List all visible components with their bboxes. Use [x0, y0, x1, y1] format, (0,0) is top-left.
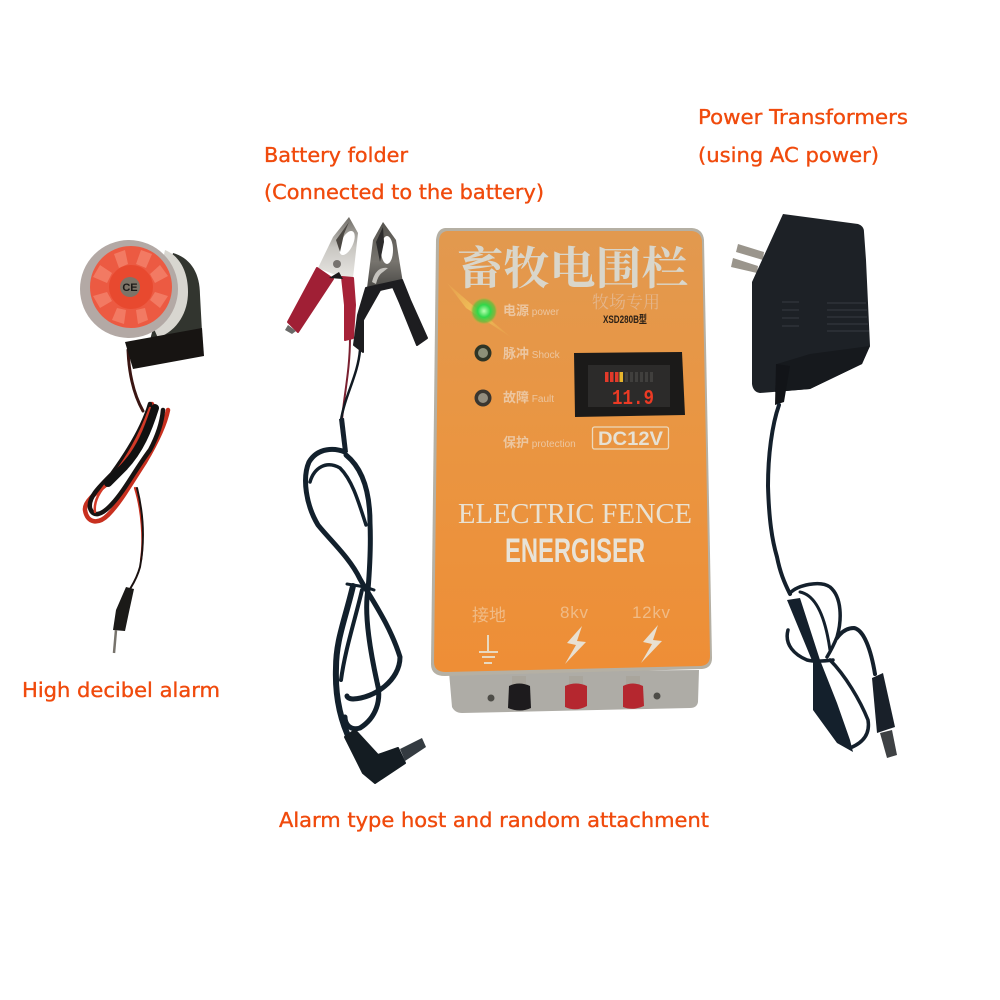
icon: lightning 8kv	[565, 626, 586, 664]
label: battery folder	[264, 143, 544, 204]
icon: lightning 12kv	[641, 625, 662, 663]
voltage display: 11.9	[612, 388, 654, 411]
terminal labels	[472, 603, 670, 625]
adapter cable	[768, 405, 875, 748]
panel: energiser unit	[431, 228, 712, 713]
LED labels: 故障 Fault	[503, 390, 554, 405]
terminals	[508, 676, 644, 710]
electric fence heading: ELECTRIC FENCE	[458, 498, 692, 530]
cable bundle	[787, 598, 853, 752]
adapter vents	[782, 302, 869, 331]
model number: XSD280B型	[603, 313, 647, 326]
siren cable bundle	[85, 350, 168, 589]
label: battery folder: (Connected to the battery)	[264, 180, 544, 204]
adapter prongs	[731, 244, 764, 273]
terminal labels: 8kv	[560, 603, 588, 622]
title chinese: 畜牧电围栏	[457, 244, 688, 294]
DC plug right angle	[345, 730, 405, 783]
mounting holes	[488, 692, 660, 702]
label: power transformers: (using AC power)	[698, 143, 879, 167]
label: battery folder: Battery folder	[264, 143, 409, 167]
black clip	[354, 222, 427, 352]
label: power transformers: Power Transformers	[698, 105, 908, 129]
subtitle chinese: 牧场专用	[592, 293, 660, 312]
energiser heading: ENERGISER	[505, 532, 645, 570]
siren body	[150, 253, 202, 340]
red clip	[285, 217, 358, 340]
cable sheath	[339, 418, 348, 452]
LED labels: 脉冲 Shock	[503, 346, 561, 361]
icon: ground symbol	[479, 635, 498, 663]
icon: alarm siren with cable	[80, 240, 204, 653]
terminal labels: 接地	[472, 606, 506, 625]
base plate	[449, 670, 699, 713]
clip wires	[341, 338, 360, 420]
label: power transformers	[698, 105, 908, 167]
LED labels: 电源 power	[503, 303, 560, 318]
icon: power adapter with cable	[731, 214, 897, 758]
adapter plug	[872, 673, 895, 733]
voltage display	[574, 352, 685, 417]
cable loops	[306, 449, 400, 742]
terminal labels: 12kv	[632, 603, 670, 622]
strain relief	[775, 364, 790, 405]
siren bracket	[125, 328, 204, 369]
siren face	[80, 240, 178, 338]
label: alarm type host: Alarm type host and random attachment	[279, 808, 709, 832]
glare streak	[447, 283, 512, 338]
LED labels: 保护 protection	[503, 435, 576, 450]
icon: battery clips and cable	[285, 217, 427, 783]
siren plug	[113, 587, 134, 631]
DC12V badge: DC12V	[598, 429, 663, 450]
adapter body	[752, 214, 870, 393]
orange housing	[431, 228, 712, 676]
label: high decibel alarm: High decibel alarm	[22, 678, 220, 702]
icon: alarm siren with cable: CE	[122, 282, 138, 294]
LED labels	[503, 303, 576, 450]
LED indicators	[470, 297, 498, 406]
